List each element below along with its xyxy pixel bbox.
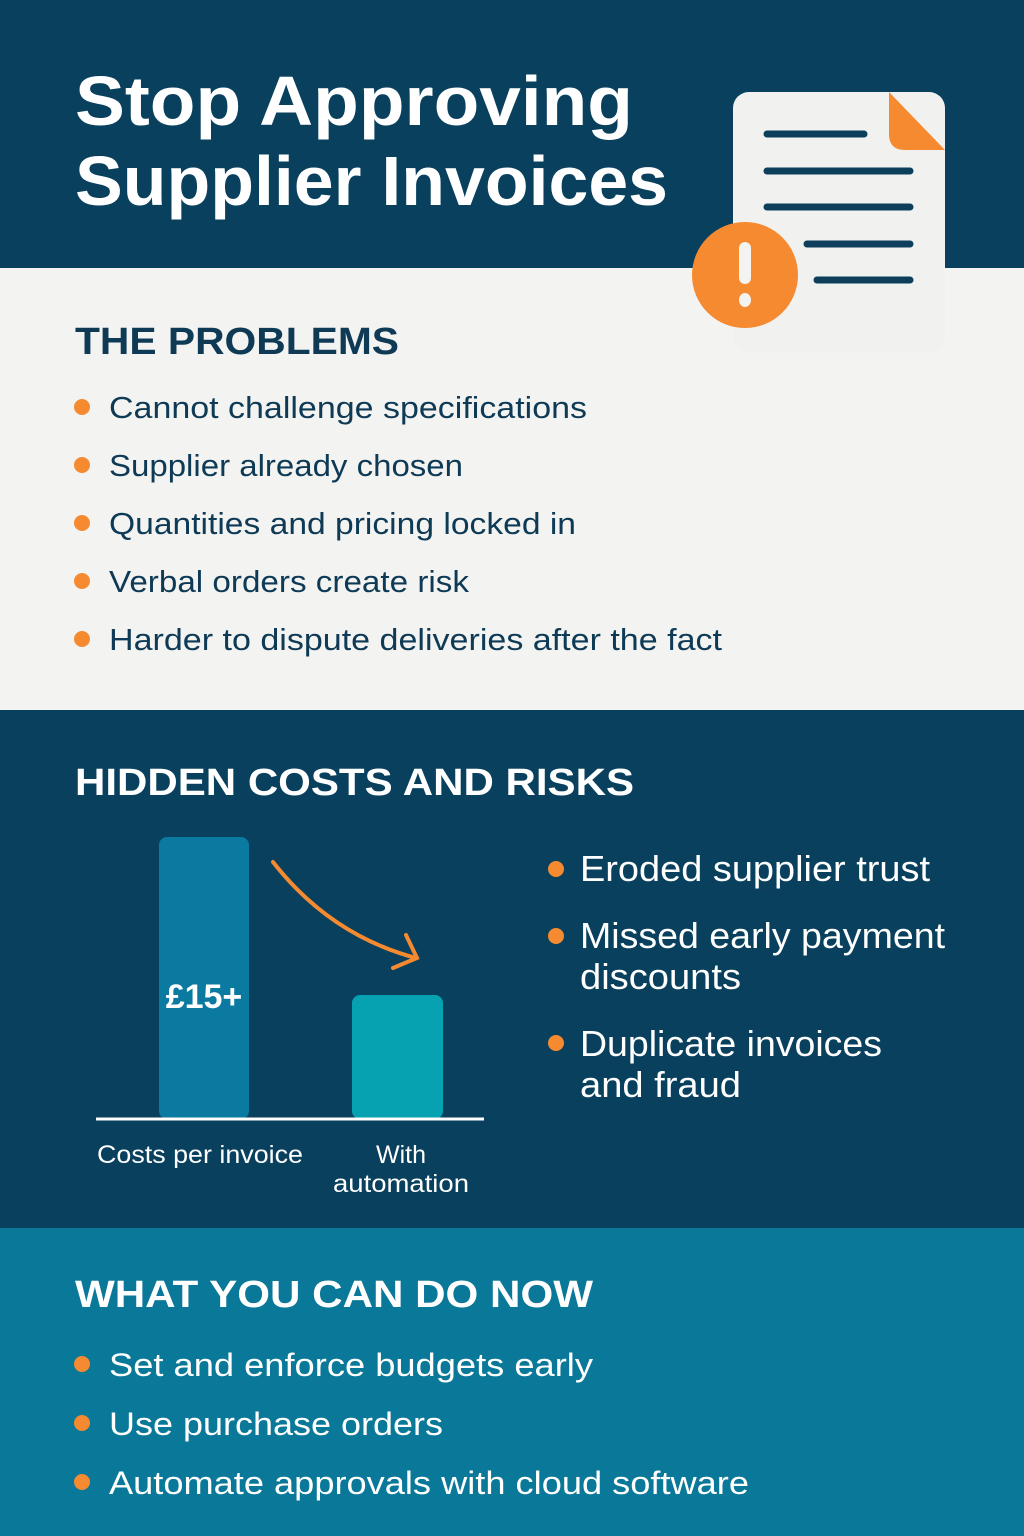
title — [75, 62, 668, 220]
problems list: Quantities and pricing locked in — [109, 506, 576, 541]
title: Supplier Invoices — [75, 142, 668, 220]
problems list: Cannot challenge specifications — [109, 390, 587, 425]
risks list: and fraud — [580, 1064, 741, 1105]
icon: invoice document with warning — [692, 92, 945, 352]
bar chart: £15+ — [166, 978, 242, 1016]
bar chart: automation — [333, 1170, 469, 1198]
problems list: Supplier already chosen — [109, 448, 463, 483]
actions list: Automate approvals with cloud software — [109, 1465, 749, 1501]
bar chart: Costs per invoice — [97, 1141, 303, 1169]
title: Stop Approving — [75, 62, 633, 140]
heading: the problems: THE PROBLEMS — [75, 321, 399, 363]
bar chart — [96, 837, 484, 1198]
risks list: Missed early payment — [580, 915, 945, 956]
problems list: Verbal orders create risk — [109, 564, 470, 599]
risks list — [548, 848, 945, 1105]
problems list: Harder to dispute deliveries after the fact — [109, 622, 722, 657]
risks list: Eroded supplier trust — [580, 848, 930, 889]
heading: what you can do now: WHAT YOU CAN DO NOW — [75, 1274, 593, 1316]
risks list: discounts — [580, 956, 741, 997]
bar chart: With — [376, 1141, 426, 1169]
arrow: cost reduction — [273, 862, 417, 968]
heading: hidden costs and risks: HIDDEN COSTS AND RISKS — [75, 762, 634, 804]
risks list: Duplicate invoices — [580, 1023, 882, 1064]
actions list: Use purchase orders — [109, 1406, 443, 1442]
problems list — [74, 390, 722, 657]
actions list: Set and enforce budgets early — [109, 1347, 593, 1383]
actions list — [74, 1347, 749, 1501]
